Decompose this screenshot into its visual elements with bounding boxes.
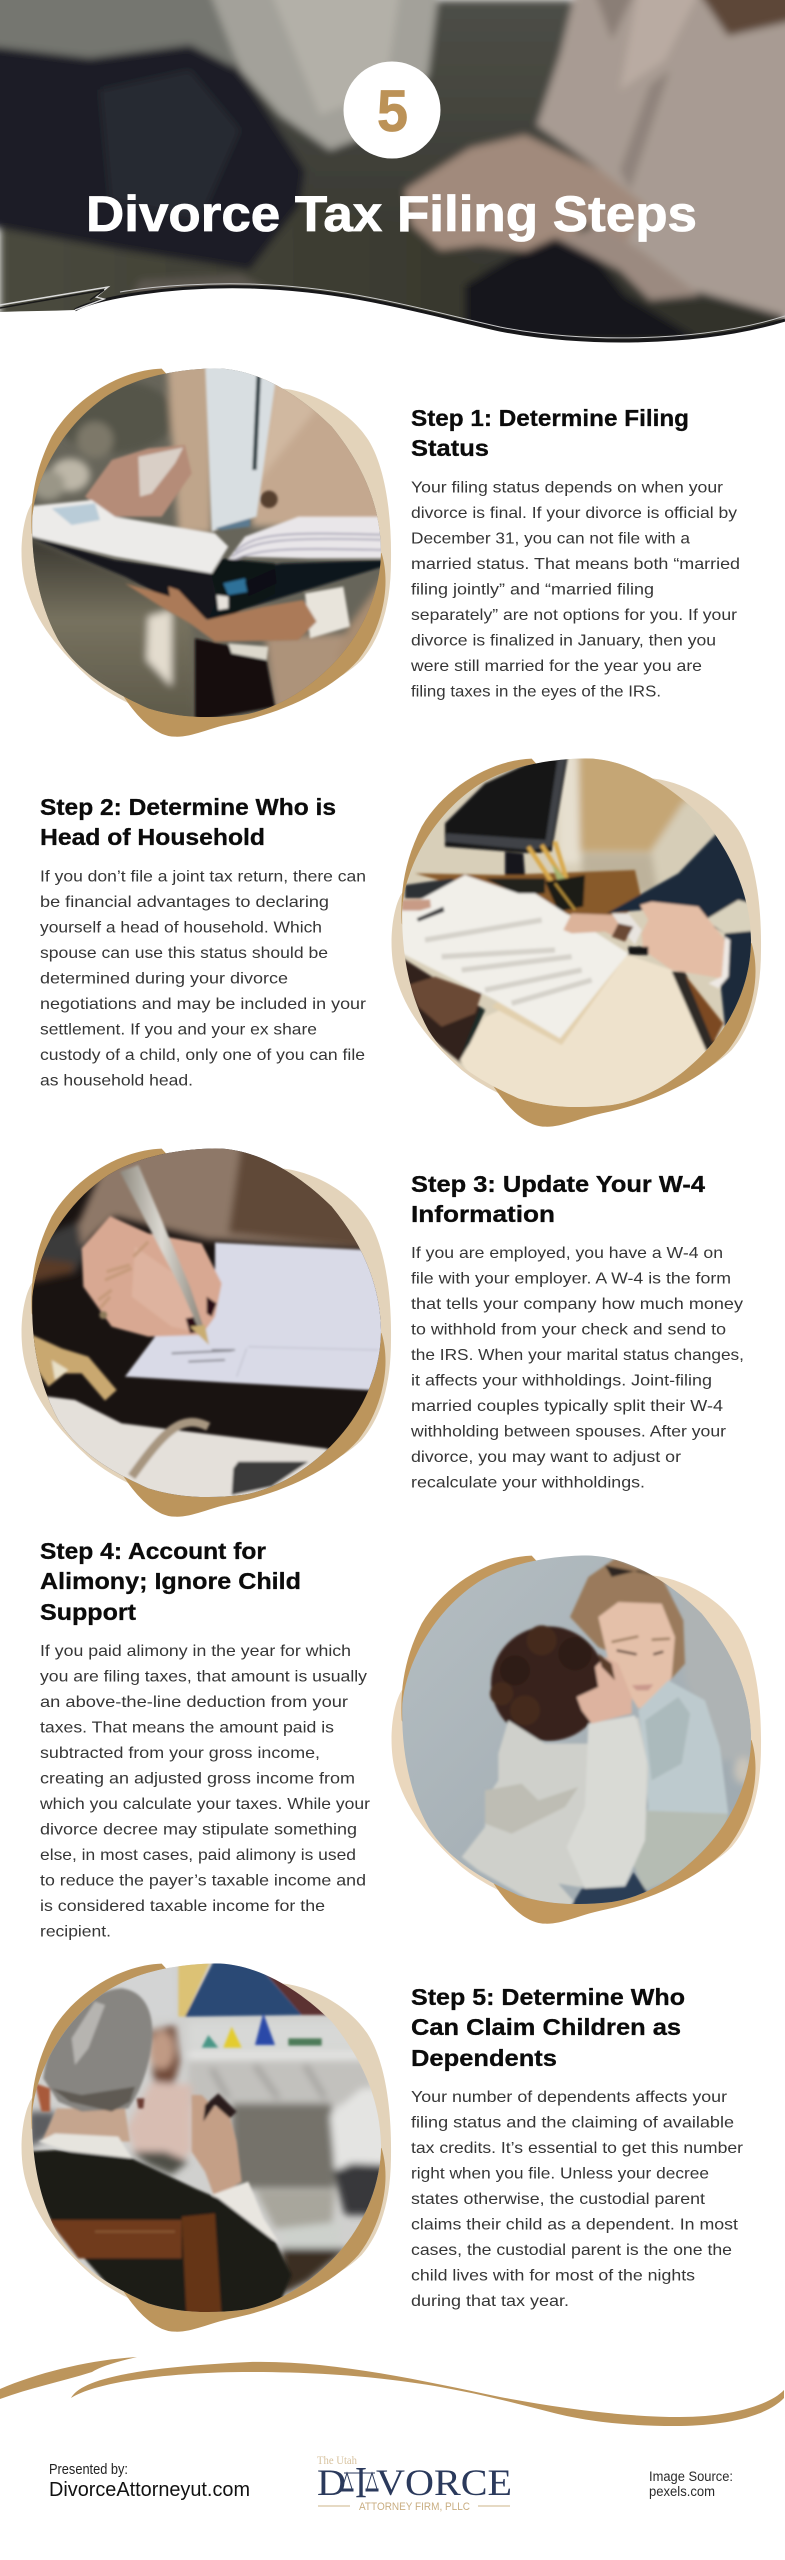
footer: firm logo: The Utah	[317, 2453, 357, 2467]
step 4 text: divorce decree may stipulate something	[40, 1822, 357, 1838]
step 5 text: claims their child as a dependent. In most	[411, 2216, 739, 2234]
step 1 text: filing jointly” and “married filing	[411, 582, 654, 599]
step 3 text: married couples typically split their W-4	[411, 1398, 723, 1415]
step 4 text: creating an adjusted gross income from	[40, 1770, 355, 1788]
footer: firm logo	[317, 2453, 512, 2513]
step 1 text: Step 1: Determine Filing	[411, 405, 689, 431]
step 5 text: cases, the custodial parent is the one the	[411, 2242, 732, 2259]
footer: image source: Image Source:	[649, 2469, 733, 2484]
step 4 text: an above-the-line deduction from your	[40, 1694, 348, 1711]
photo blob: step 4 mother hugging child	[385, 1547, 770, 1932]
step 5 text: Step 5: Determine Who	[411, 1984, 685, 2010]
step 3 text: Information	[411, 1201, 555, 1227]
step 5 text: right when you file. Unless your decree	[411, 2166, 709, 2182]
photo blob: step 1 open binder	[15, 360, 400, 745]
step 4 text: taxes. That means the amount paid is	[40, 1720, 334, 1736]
photo blob: step 5 woman in therapy session	[15, 1955, 400, 2340]
step 1 text: married status. That means both “married	[411, 556, 740, 573]
step 5 text: during that tax year.	[411, 2293, 569, 2310]
step 4 text: to reduce the payer’s taxable income and	[40, 1872, 366, 1890]
badge: number 5	[344, 62, 440, 158]
step 5 text	[411, 1984, 743, 2310]
header photo banner	[0, 0, 785, 350]
badge: number 5: 5	[377, 79, 408, 144]
step 5 text: tax credits. It’s essential to get this number	[411, 2140, 743, 2157]
step 5 text: Can Claim Children as	[411, 2014, 681, 2040]
step 1 text: Status	[411, 435, 489, 461]
footer: presented by: DivorceAttorneyut.com	[49, 2478, 250, 2501]
step 2 text: be financial advantages to declaring	[40, 894, 329, 911]
footer gold wave	[0, 2357, 784, 2426]
footer: presented by: Presented by:	[49, 2462, 128, 2478]
step 1 text: divorce is finalized in January, then you	[411, 633, 716, 650]
step 1 text: separately” are not options for you. If your	[411, 607, 737, 624]
step 2 text: determined during your divorce	[40, 971, 288, 988]
step 5 text: Dependents	[411, 2045, 557, 2071]
step 4 text	[39, 1538, 370, 1940]
step 4 text: Support	[40, 1599, 136, 1625]
step 3 text: If you are employed, you have a W-4 on	[411, 1245, 723, 1262]
footer: firm logo: I	[355, 2458, 367, 2507]
step 1 text: December 31, you can not file with a	[411, 531, 690, 548]
step 2 text	[40, 794, 366, 1090]
step 1 text: filing taxes in the eyes of the IRS.	[411, 684, 661, 701]
step 3 text: that tells your company how much money	[411, 1296, 743, 1313]
step 4 text: Step 4: Account for	[40, 1538, 266, 1564]
step 2 text: as household head.	[40, 1073, 193, 1090]
step 3 text: recalculate your withholdings.	[411, 1474, 645, 1492]
step 3 text: it affects your withholdings. Joint-filing	[411, 1372, 712, 1390]
step 4 text: recipient.	[40, 1924, 111, 1940]
step 2 text: Step 2: Determine Who is	[40, 794, 336, 820]
step 1 text	[410, 405, 740, 701]
step 4 text: you are filing taxes, that amount is usually	[40, 1668, 367, 1686]
step 5 text: child lives with for most of the nights	[411, 2268, 695, 2284]
step 3 text: divorce, you may want to adjust or	[411, 1449, 681, 1466]
step 2 text: Head of Household	[40, 824, 265, 850]
step 3 text: to withhold from your check and send to	[411, 1322, 726, 1338]
step 2 text: custody of a child, only one of you can file	[40, 1047, 365, 1064]
photo blob: step 3 writing with pen	[15, 1137, 400, 1525]
step 5 text: Your number of dependents affects your	[411, 2089, 727, 2106]
icon: scales of justice	[341, 2473, 378, 2491]
step 3 text: file with your employer. A W-4 is the form	[411, 1270, 731, 1288]
footer: firm logo: ATTORNEY FIRM, PLLC	[359, 2501, 470, 2513]
step 5 text: filing status and the claiming of available	[411, 2114, 734, 2132]
step 2 text: yourself a head of household. Which	[40, 920, 322, 937]
step 4 text: is considered taxable income for the	[40, 1898, 325, 1915]
header wave divider	[0, 284, 785, 362]
step 5 text: states otherwise, the custodial parent	[411, 2191, 706, 2208]
step 3 text: the IRS. When your marital status changes,	[411, 1347, 744, 1364]
step 1 text: were still married for the year you are	[410, 658, 702, 675]
step 1 text: Your filing status depends on when your	[411, 480, 723, 497]
step 1 text: divorce is final. If your divorce is official by	[411, 505, 737, 522]
step 4 text: which you calculate your taxes. While your	[39, 1796, 370, 1813]
step 4 text: If you paid alimony in the year for which	[40, 1643, 351, 1660]
step 2 text: If you don’t file a joint tax return, there can	[40, 869, 366, 886]
footer: firm logo: D	[317, 2463, 346, 2504]
footer: presented by	[49, 2462, 250, 2501]
step 3 text: withholding between spouses. After your	[410, 1424, 726, 1440]
step 2 text: spouse can use this status should be	[40, 945, 328, 962]
footer: image source: pexels.com	[649, 2484, 715, 2499]
step 2 text: negotiations and may be included in your	[40, 996, 366, 1013]
step 4 text: Alimony; Ignore Child	[40, 1568, 301, 1594]
step 3 text: Step 3: Update Your W-4	[411, 1171, 705, 1197]
footer: firm logo: VORCE	[376, 2463, 512, 2504]
step 4 text: else, in most cases, paid alimony is used	[40, 1847, 356, 1864]
title: Divorce Tax Filing Steps	[86, 186, 697, 242]
step 2 text: settlement. If you and your ex share	[40, 1022, 317, 1039]
footer: image source	[649, 2469, 733, 2499]
step 4 text: subtracted from your gross income,	[40, 1745, 320, 1762]
photo blob: step 2 handing over papers	[385, 750, 770, 1135]
step 3 text	[410, 1171, 744, 1492]
